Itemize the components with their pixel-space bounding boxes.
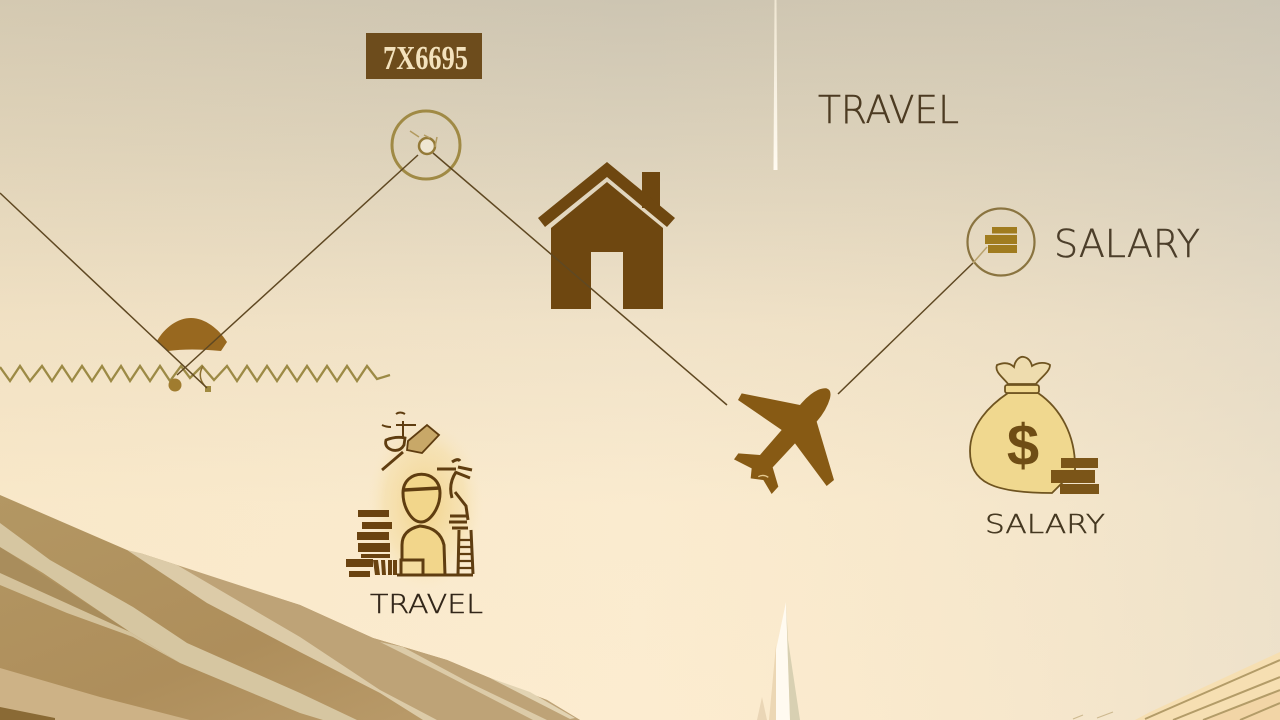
heading: salary: SALARY — [1054, 222, 1200, 266]
icon: parachute dome — [157, 318, 227, 392]
icon: money bag — [970, 357, 1099, 494]
icon: house — [538, 162, 675, 309]
label: salary lower: SALARY — [985, 510, 1105, 540]
icon: circle node top — [392, 111, 460, 179]
icon: money bag: $ — [1007, 413, 1039, 478]
books — [346, 510, 397, 577]
icon: small plant and leaf — [382, 412, 439, 470]
vertical white divider — [774, 0, 778, 170]
value badge — [366, 33, 482, 79]
zigzag line — [0, 366, 390, 381]
icon: airplane — [734, 388, 834, 494]
value badge: 7X6695 — [383, 40, 468, 77]
skyline spire — [757, 602, 800, 720]
hills: bottom right — [1073, 652, 1280, 720]
hills: bottom left — [0, 495, 580, 720]
heading: travel: TRAVEL — [818, 88, 959, 132]
person — [397, 474, 473, 575]
icon: traveller with books and tower — [346, 412, 483, 590]
icon: circle node with coins — [968, 208, 1034, 276]
tower — [437, 460, 473, 574]
label: travel lower: TRAVEL — [370, 590, 483, 620]
connector line chart — [0, 153, 973, 405]
